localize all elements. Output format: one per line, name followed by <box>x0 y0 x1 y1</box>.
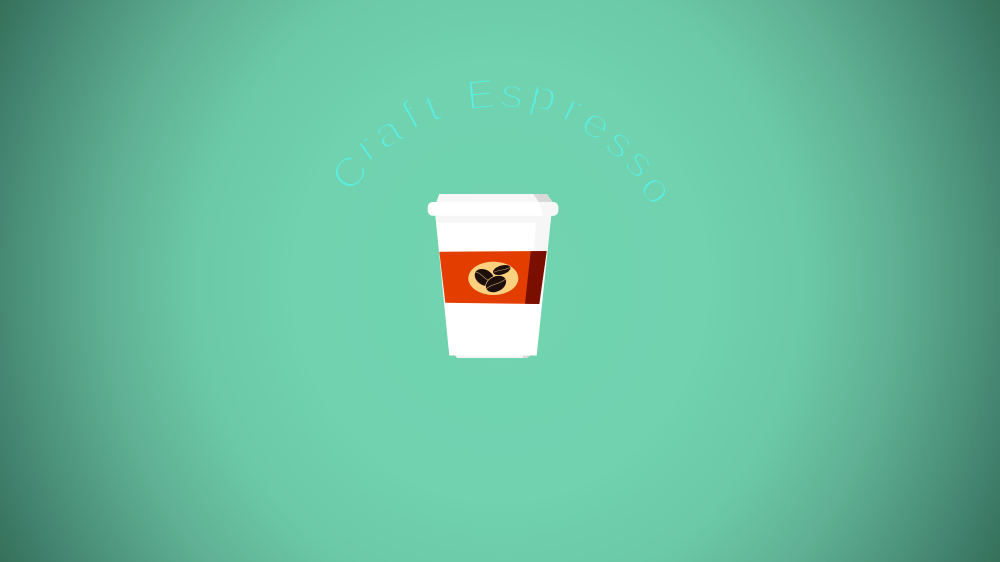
cup body <box>435 215 551 356</box>
title: curved Craft Espresso: o <box>630 164 682 214</box>
title: curved Craft Espresso: a <box>364 106 411 159</box>
lid rim shading <box>538 202 558 216</box>
title: curved Craft Espresso: s <box>615 138 664 187</box>
title: curved Craft Espresso: t <box>418 84 447 131</box>
title: curved Craft Espresso: C <box>322 146 378 200</box>
title: curved Craft Espresso: e <box>574 98 619 150</box>
title: curved Craft Espresso: s <box>597 118 643 169</box>
title: curved Craft Espresso <box>322 70 682 214</box>
icon: takeaway coffee cup <box>428 194 558 358</box>
left bean <box>472 265 497 290</box>
upper bean <box>492 263 512 277</box>
title: curved Craft Espresso: s <box>498 70 526 118</box>
cup sleeve <box>439 251 547 304</box>
sleeve dark side <box>525 251 547 304</box>
cup base shadow <box>523 355 531 358</box>
title: curved Craft Espresso: r <box>347 125 386 171</box>
cup shadow under lid <box>435 215 551 223</box>
title: curved Craft Espresso: E <box>464 70 497 119</box>
icon: coffee beans <box>472 263 512 296</box>
title: curved Craft Espresso: f <box>394 92 428 139</box>
sleeve logo oval <box>468 262 518 295</box>
lid top <box>436 194 553 203</box>
cup base <box>455 355 531 358</box>
title: curved Craft Espresso: p <box>526 71 562 121</box>
title: curved Craft Espresso: r <box>556 85 590 133</box>
lower bean <box>483 272 509 296</box>
cup body right shading <box>534 215 551 252</box>
lid rim <box>428 202 558 216</box>
lid top shadow <box>533 194 552 203</box>
